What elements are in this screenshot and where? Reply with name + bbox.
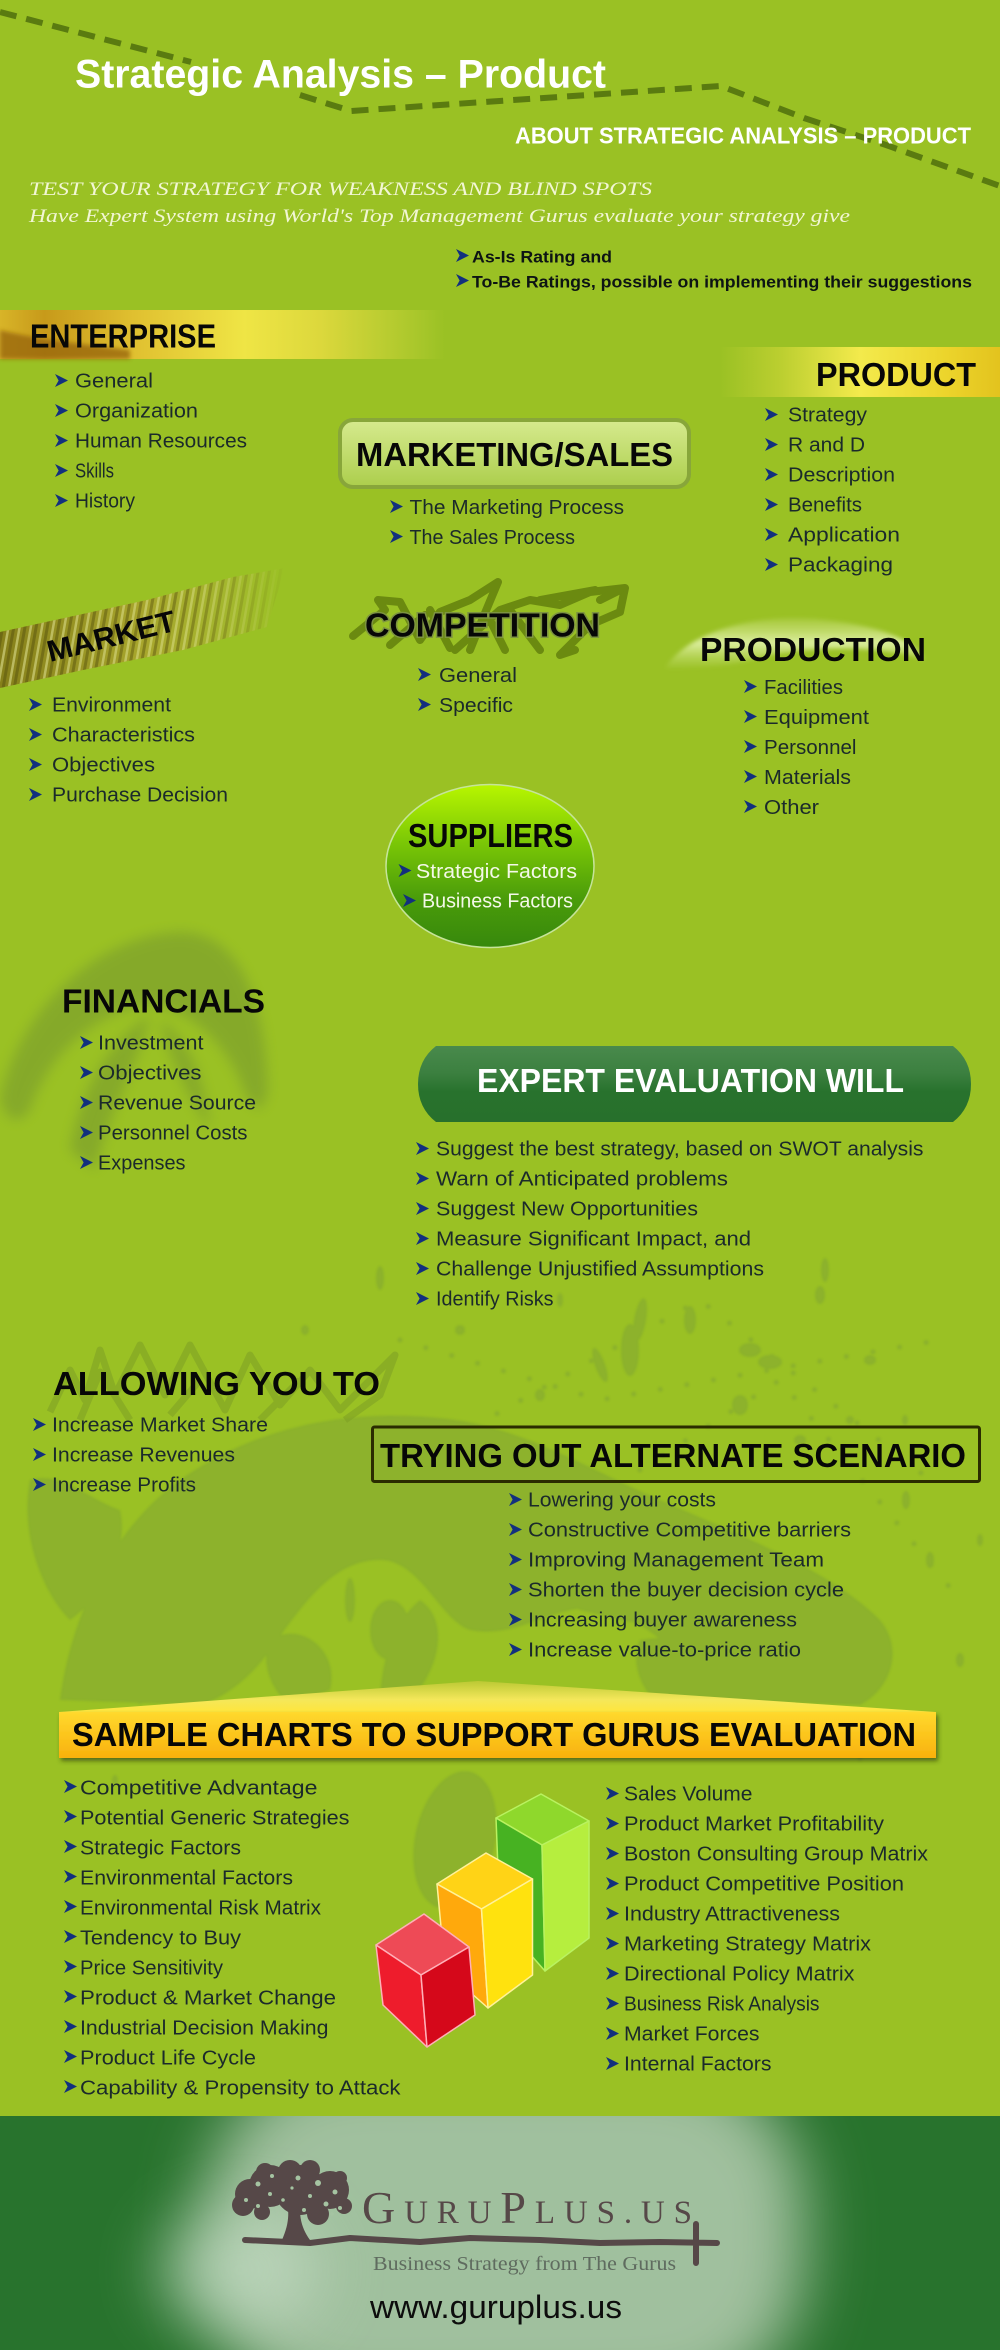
panel: production bbox=[665, 618, 926, 819]
financials list bbox=[80, 1032, 256, 1174]
scenario list: Improving Management Team bbox=[528, 1548, 824, 1572]
scenario list: Shorten the buyer decision cycle bbox=[528, 1578, 844, 1602]
footer background bbox=[0, 2116, 1000, 2350]
right chart list: Boston Consulting Group Matrix bbox=[624, 1842, 929, 1866]
enterprise list: General bbox=[75, 370, 153, 392]
financials list: Objectives bbox=[98, 1062, 202, 1084]
financials list: Personnel Costs bbox=[98, 1122, 248, 1144]
scenario heading: TRYING OUT ALTERNATE SCENARIO bbox=[380, 1437, 966, 1474]
left chart list: Competitive Advantage bbox=[80, 1776, 318, 1800]
expert evaluation list: Challenge Unjustified Assumptions bbox=[436, 1258, 764, 1280]
left chart list: Price Sensitivity bbox=[80, 1956, 224, 1980]
panel: competition bbox=[353, 582, 625, 717]
decorative scrawl behind allowing you to bbox=[50, 1345, 395, 1420]
marketing sales list: The Sales Process bbox=[410, 526, 575, 549]
product list bbox=[765, 404, 900, 576]
expert evaluation list: Warn of Anticipated problems bbox=[436, 1168, 728, 1190]
market list: Environment bbox=[52, 694, 171, 716]
enterprise list: Human Resources bbox=[75, 430, 247, 452]
logo: tree bbox=[232, 2160, 352, 2240]
left chart list: Industrial Decision Making bbox=[80, 2016, 328, 2040]
allowing you to heading: ALLOWING YOU TO bbox=[53, 1365, 380, 1402]
enterprise list bbox=[55, 370, 247, 512]
market list: Purchase Decision bbox=[52, 784, 228, 806]
panel: expert evaluation bbox=[416, 1046, 971, 1310]
right chart list: Marketing Strategy Matrix bbox=[624, 1932, 872, 1956]
product heading: PRODUCT bbox=[816, 356, 976, 393]
right chart list: Business Risk Analysis bbox=[624, 1992, 820, 2016]
product list: Application bbox=[788, 524, 900, 546]
dashed trend line bbox=[0, 12, 1000, 186]
website url: www.guruplus.us bbox=[369, 2289, 622, 2325]
competition list: Specific bbox=[439, 694, 513, 717]
left chart list: Capability & Propensity to Attack bbox=[80, 2076, 401, 2100]
financials swoosh bbox=[0, 932, 268, 1170]
production list: Personnel bbox=[764, 736, 856, 759]
production list: Other bbox=[764, 796, 819, 819]
product list: Description bbox=[788, 464, 895, 486]
allowing you to list bbox=[33, 1414, 268, 1496]
allowing you to list: Increase Market Share bbox=[52, 1414, 268, 1436]
scenario list: Increasing buyer awareness bbox=[528, 1608, 797, 1632]
right chart list: Product Competitive Position bbox=[624, 1872, 904, 1896]
production list: Materials bbox=[764, 766, 851, 789]
left chart list: Environmental Factors bbox=[80, 1866, 293, 1890]
expert evaluation heading box bbox=[418, 1046, 971, 1122]
right chart list bbox=[606, 1782, 929, 2076]
panel: footer bbox=[0, 2060, 1000, 2350]
logo: wordmark: G URUP LUS.US bbox=[362, 2182, 692, 2233]
logo: tagline: Business Strategy from The Gurus bbox=[373, 2253, 676, 2275]
expert evaluation list: Suggest the best strategy, based on SWOT analysis bbox=[436, 1138, 924, 1160]
marketing sales heading box bbox=[340, 420, 689, 487]
background splash bbox=[27, 1258, 983, 1917]
competition scrawl bbox=[353, 582, 625, 655]
left chart list: Product & Market Change bbox=[80, 1986, 336, 2010]
panel: financials bbox=[0, 932, 268, 1174]
competition heading: COMPETITION bbox=[365, 606, 600, 644]
left chart list: Strategic Factors bbox=[80, 1836, 241, 1860]
panel: trying out alternate scenario bbox=[372, 1427, 980, 1662]
financials list: Investment bbox=[98, 1032, 204, 1054]
3d bar chart icon bbox=[376, 1794, 589, 2047]
enterprise list: History bbox=[75, 490, 136, 512]
market list: Characteristics bbox=[52, 724, 195, 746]
title: Strategic Analysis – Product bbox=[75, 52, 606, 96]
market list: Objectives bbox=[52, 754, 155, 776]
allowing you to list: Increase Profits bbox=[52, 1474, 196, 1496]
product heading band bbox=[720, 347, 1000, 397]
yellow bar bbox=[437, 1853, 532, 2008]
right chart list: Product Market Profitability bbox=[624, 1812, 885, 1836]
enterprise list: Organization bbox=[75, 400, 198, 422]
production list: Facilities bbox=[764, 676, 843, 699]
intro text: Have Expert System using World's Top Management Gurus evaluate your strategy give bbox=[28, 206, 850, 227]
green bar bbox=[496, 1794, 589, 1971]
production list bbox=[744, 676, 869, 819]
product list: R and D bbox=[788, 434, 865, 456]
subtitle: ABOUT STRATEGIC ANALYSIS – PRODUCT bbox=[515, 122, 971, 148]
expert evaluation list: Measure Significant Impact, and bbox=[436, 1228, 751, 1250]
ratings list: To-Be Ratings, possible on implementing their suggestions bbox=[472, 272, 972, 292]
market list bbox=[29, 694, 228, 806]
competition list bbox=[418, 664, 517, 717]
right chart list: Market Forces bbox=[624, 2022, 760, 2046]
product list: Packaging bbox=[788, 554, 893, 576]
marketing sales list bbox=[390, 496, 624, 549]
panel: suppliers bbox=[386, 784, 594, 948]
financials heading: FINANCIALS bbox=[62, 982, 265, 1020]
panel: product bbox=[720, 347, 1000, 576]
market textured band bbox=[0, 568, 285, 688]
enterprise list: Skills bbox=[75, 460, 114, 482]
financials list: Expenses bbox=[98, 1152, 186, 1174]
market heading: MARKET bbox=[44, 605, 179, 669]
intro text: TEST YOUR STRATEGY FOR WEAKNESS AND BLIND SPOTS bbox=[29, 179, 653, 200]
scenario heading box bbox=[372, 1427, 980, 1482]
panel: enterprise bbox=[0, 310, 445, 512]
left chart list bbox=[64, 1776, 401, 2100]
left chart list: Product Life Cycle bbox=[80, 2046, 256, 2070]
intro text bbox=[28, 179, 850, 227]
left chart list: Potential Generic Strategies bbox=[80, 1806, 350, 1830]
suppliers list bbox=[398, 860, 577, 912]
panel: market bbox=[0, 568, 285, 806]
red bar bbox=[376, 1914, 475, 2047]
ratings list bbox=[456, 248, 972, 292]
left chart list: Environmental Risk Matrix bbox=[80, 1896, 322, 1920]
allowing you to list: Increase Revenues bbox=[52, 1444, 235, 1466]
panel: allowing you to bbox=[33, 1365, 380, 1496]
suppliers list: Strategic Factors bbox=[416, 860, 577, 883]
production swoosh bbox=[665, 618, 925, 668]
scenario list bbox=[509, 1488, 851, 1662]
competition list: General bbox=[439, 664, 517, 687]
expert evaluation list bbox=[416, 1138, 924, 1310]
production heading: PRODUCTION bbox=[700, 631, 926, 668]
right chart list: Directional Policy Matrix bbox=[624, 1962, 855, 1986]
right chart list: Sales Volume bbox=[624, 1782, 752, 1806]
production list: Equipment bbox=[764, 706, 869, 729]
sample charts banner bbox=[59, 1681, 936, 1758]
expert evaluation heading: EXPERT EVALUATION WILL bbox=[477, 1062, 904, 1099]
product list: Benefits bbox=[788, 494, 862, 516]
expert evaluation list: Identify Risks bbox=[436, 1288, 554, 1310]
scenario list: Lowering your costs bbox=[528, 1488, 716, 1512]
panel: sample charts bbox=[59, 1681, 936, 2100]
marketing sales heading: MARKETING/SALES bbox=[356, 436, 673, 473]
sample charts heading: SAMPLE CHARTS TO SUPPORT GURUS EVALUATION bbox=[72, 1716, 916, 1753]
financials list: Revenue Source bbox=[98, 1092, 256, 1114]
suppliers ellipse bbox=[386, 784, 594, 948]
suppliers list: Business Factors bbox=[422, 890, 573, 912]
enterprise heading: ENTERPRISE bbox=[30, 318, 216, 354]
suppliers heading: SUPPLIERS bbox=[408, 817, 573, 854]
product list: Strategy bbox=[788, 404, 868, 426]
panel: marketing sales bbox=[340, 420, 689, 549]
expert evaluation list: Suggest New Opportunities bbox=[436, 1198, 698, 1220]
right chart list: Internal Factors bbox=[624, 2052, 772, 2076]
enterprise heading band bbox=[0, 310, 445, 359]
scenario list: Increase value-to-price ratio bbox=[528, 1638, 801, 1662]
right chart list: Industry Attractiveness bbox=[624, 1902, 840, 1926]
ratings list: As-Is Rating and bbox=[472, 248, 612, 266]
scenario list: Constructive Competitive barriers bbox=[528, 1518, 851, 1542]
marketing sales list: The Marketing Process bbox=[410, 496, 624, 519]
left chart list: Tendency to Buy bbox=[80, 1926, 242, 1950]
logo: ground and cross bbox=[245, 2224, 717, 2263]
